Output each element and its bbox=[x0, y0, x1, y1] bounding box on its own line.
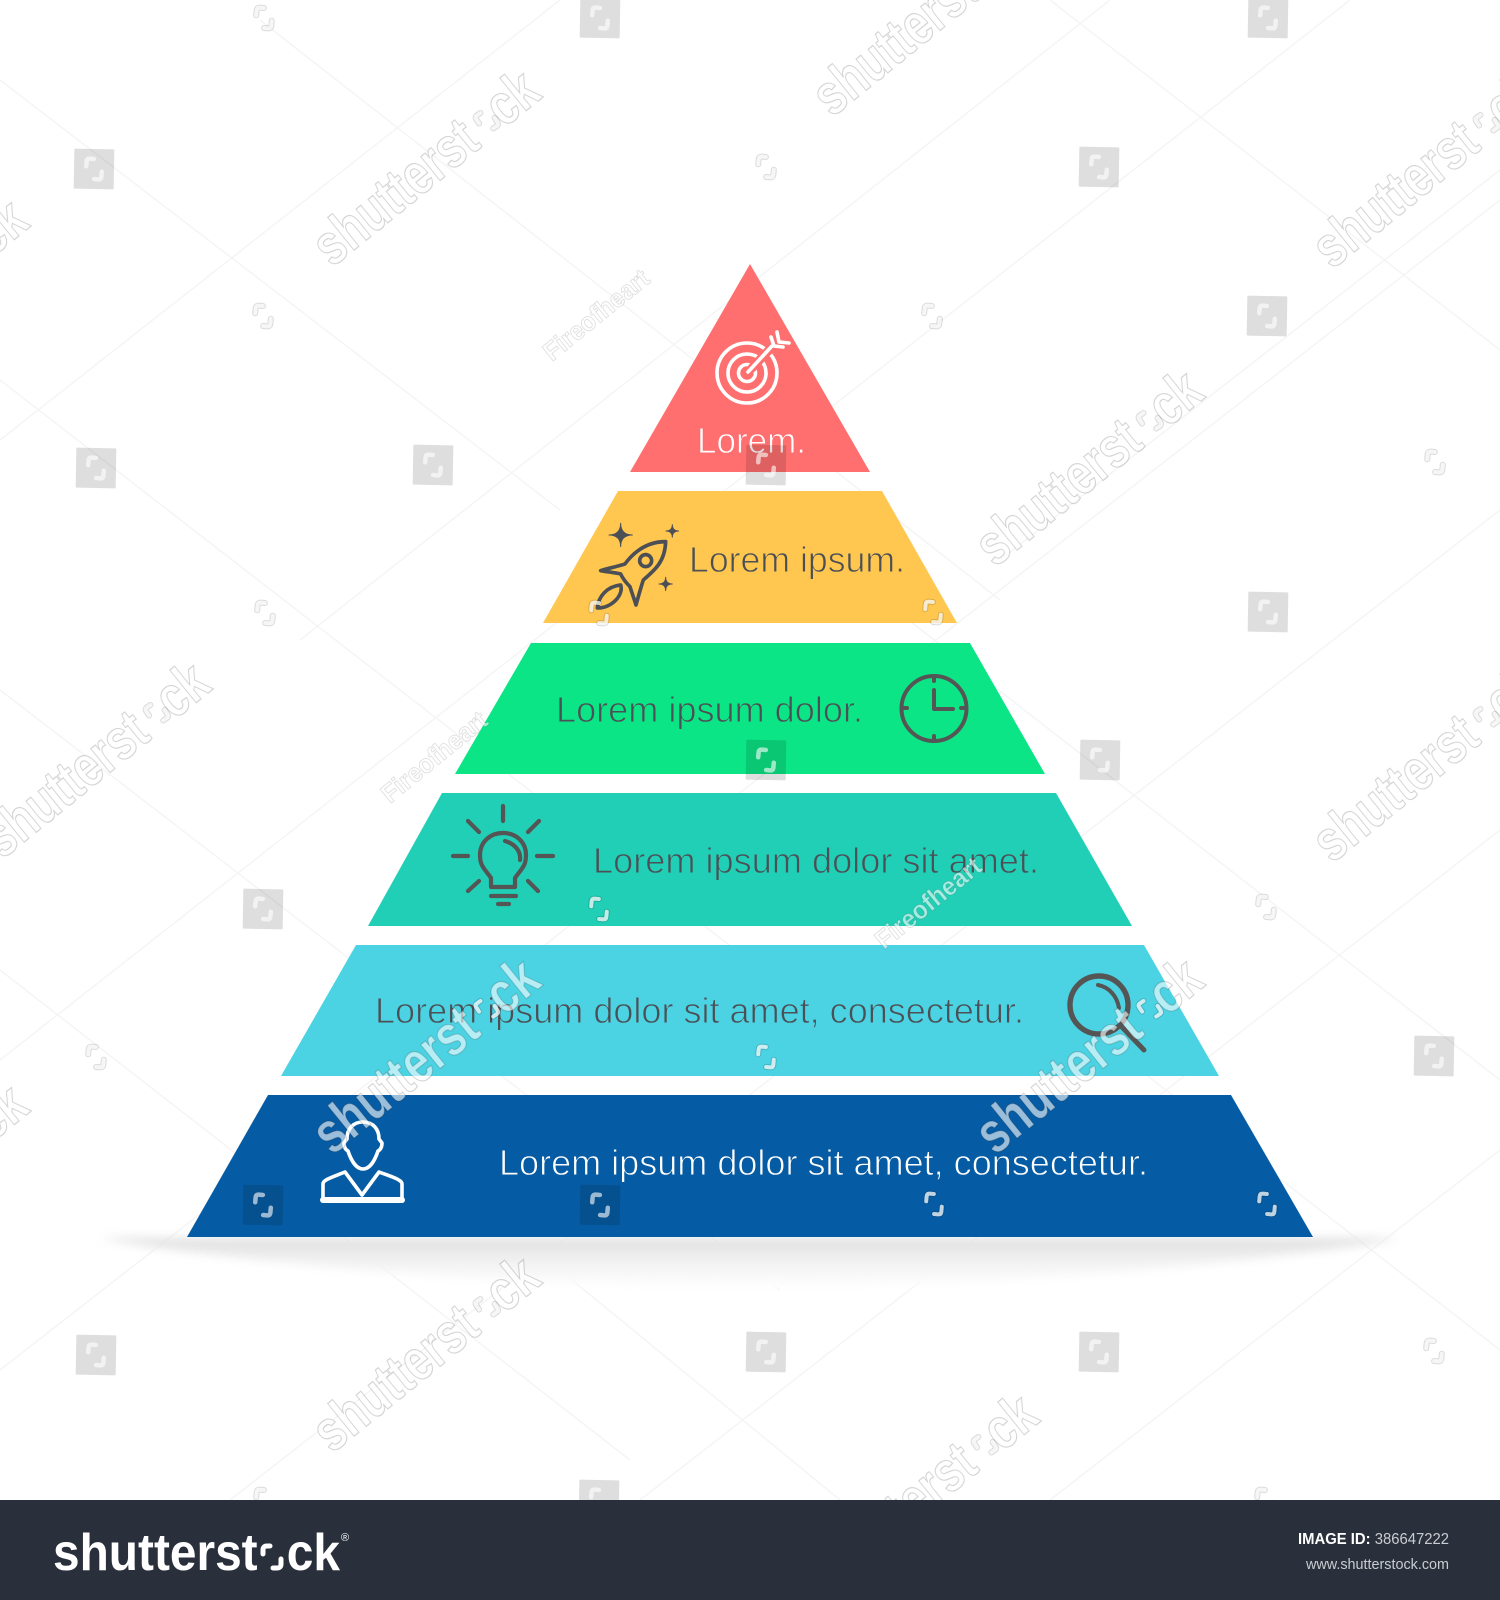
icon: clock bbox=[902, 676, 966, 741]
tier 3: green bbox=[455, 643, 1045, 774]
label: Lorem ipsum dolor sit amet, consectetur.: Lorem ipsum dolor sit amet, consectetur. bbox=[375, 990, 1024, 1031]
icon: magnifier bbox=[1070, 976, 1144, 1050]
stock watermarks: shutterstock bbox=[962, 944, 1215, 1166]
stock watermarks: Fireofheart bbox=[869, 851, 987, 955]
stock watermarks: shutterstock bbox=[962, 356, 1215, 578]
footer bar bbox=[0, 1500, 1500, 1600]
label: Lorem ipsum.: Lorem ipsum. bbox=[689, 539, 905, 580]
stock watermarks: shutterstock bbox=[299, 944, 552, 1166]
tier 2: yellow bbox=[543, 491, 957, 623]
tier 4: teal bbox=[368, 793, 1132, 926]
label: Lorem ipsum dolor sit amet, consectetur.: Lorem ipsum dolor sit amet, consectetur. bbox=[499, 1142, 1148, 1183]
label: Lorem ipsum dolor sit amet.: Lorem ipsum dolor sit amet. bbox=[593, 840, 1039, 881]
icon: light bulb bbox=[453, 806, 553, 904]
footer logo: shutterstock: shutterstock bbox=[53, 1524, 340, 1582]
stock watermarks: Fireofheart bbox=[375, 705, 493, 809]
stock watermarks: shutterstock bbox=[299, 1242, 552, 1464]
footer logo: shutterstock: ® bbox=[341, 1532, 349, 1544]
stock watermarks: Fireofheart bbox=[537, 263, 655, 367]
footer website: www.shutterstock.com bbox=[1305, 1556, 1449, 1573]
label: Lorem ipsum dolor.: Lorem ipsum dolor. bbox=[556, 689, 863, 730]
label: Lorem.: Lorem. bbox=[697, 420, 806, 461]
tier 1: red apex bbox=[630, 264, 870, 472]
tier 6: blue base bbox=[187, 1095, 1313, 1237]
tier 5: cyan bbox=[281, 945, 1219, 1076]
pyramid chart bbox=[187, 264, 1313, 1237]
pyramid ground shadow bbox=[100, 1238, 1400, 1288]
icon: person bbox=[323, 1122, 402, 1201]
stock watermarks: shutterstock bbox=[299, 56, 552, 278]
stock watermarks: shutterstock bbox=[797, 1380, 1050, 1600]
icon: rocket with stars bbox=[597, 523, 679, 608]
icon: target with arrow bbox=[717, 332, 789, 403]
footer image id: IMAGE ID: 386647222 bbox=[1298, 1531, 1449, 1548]
